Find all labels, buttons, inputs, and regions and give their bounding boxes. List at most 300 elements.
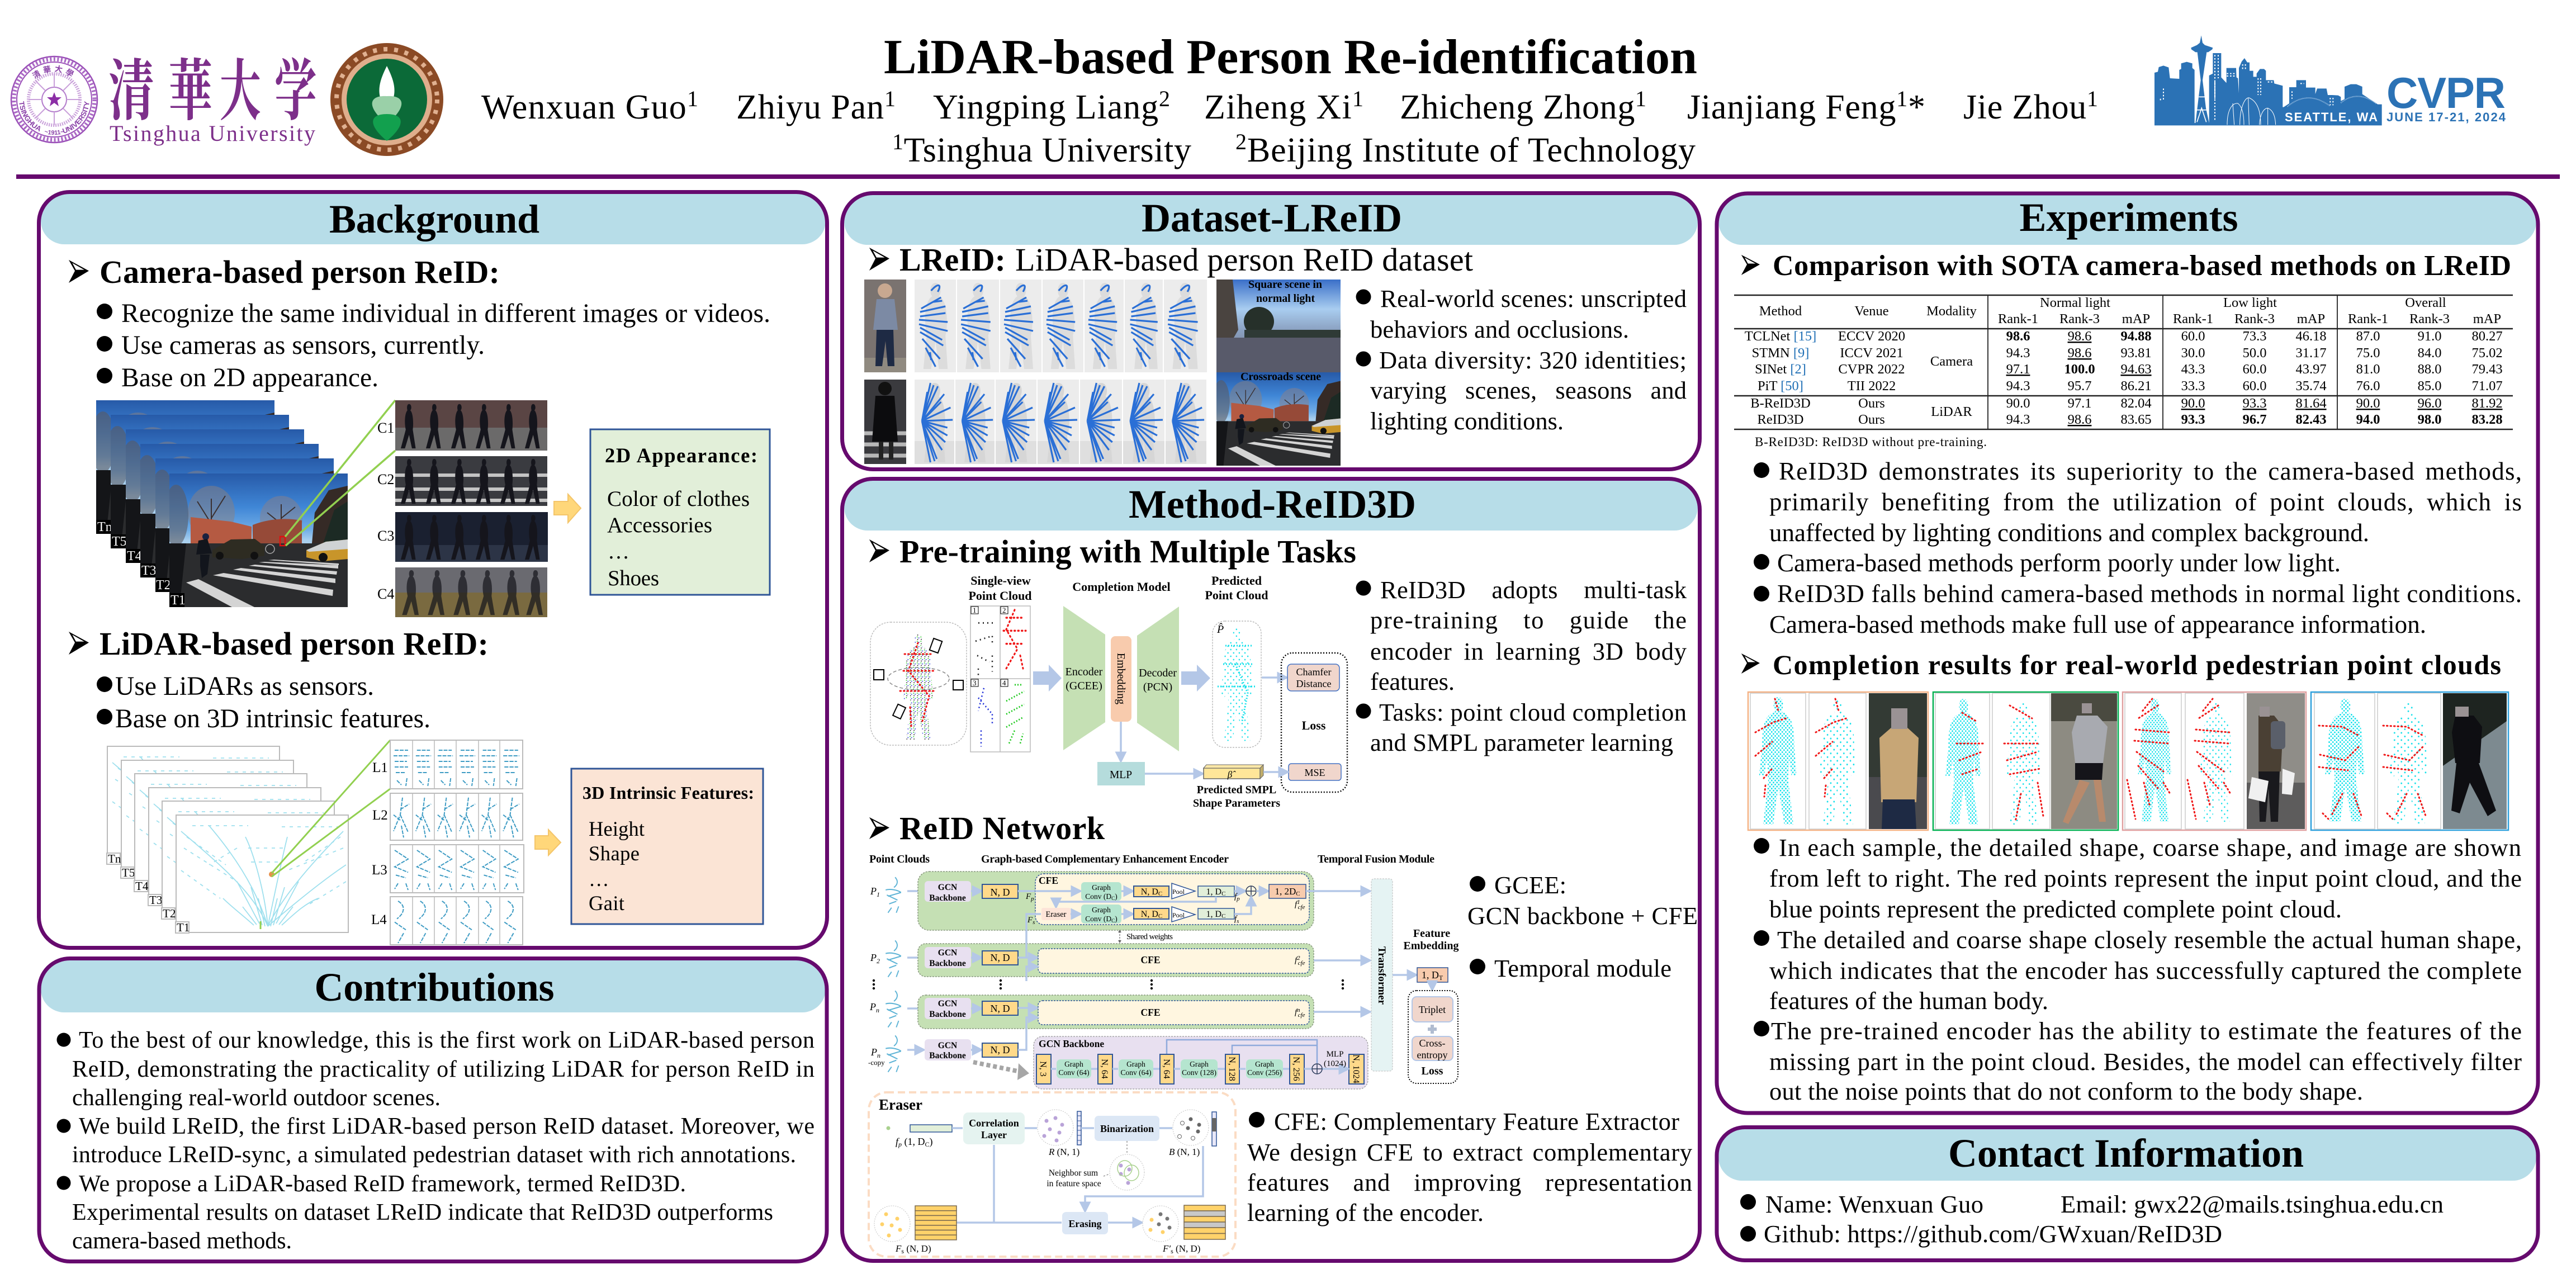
single-view grid <box>970 606 1030 752</box>
CFE block: ) <box>1115 892 1117 901</box>
image stack: LiDAR frames: Tn <box>108 852 121 865</box>
CFE block: C <box>1158 891 1162 897</box>
output features F's: (N, D) <box>1173 1243 1200 1254</box>
text: LiDAR bullets: Use LiDARs as sensors. <box>115 672 374 701</box>
predicted point cloud <box>1213 621 1261 747</box>
table: comparison: 60.0 <box>2243 378 2266 394</box>
text: contributions list: We build LReID, the first LiDAR-based person ReID dataset. Moreover, we <box>79 1114 815 1139</box>
GCN backbone detail: GCN Backbone <box>1039 1038 1104 1049</box>
table: comparison: 90.0 <box>2356 396 2380 411</box>
CFE block: F <box>1027 916 1033 925</box>
row 2: GCN <box>938 948 957 958</box>
CFE block: 1 <box>1297 899 1300 906</box>
column labels: Point Clouds <box>869 853 930 865</box>
row 2: 2 <box>1297 955 1300 962</box>
point clouds: P <box>871 1046 877 1058</box>
decoder: (PCN) <box>1143 681 1172 693</box>
erasing <box>1062 1212 1108 1234</box>
feature embedding <box>1393 927 1459 990</box>
image: square scene <box>1216 278 1341 372</box>
image stack: camera frames: T2 <box>156 578 171 593</box>
point clouds: -copy <box>868 1058 885 1067</box>
table: comparison: Rank-1 <box>2173 311 2213 326</box>
table: comparison: 94.63 <box>2120 362 2152 377</box>
panel: contributions <box>39 958 827 1261</box>
subheading: LReID: LReID: <box>899 242 1006 278</box>
CFE block: Conv (D <box>1085 915 1111 923</box>
text: camera bullets: Use cameras as sensors, currently. <box>121 331 485 360</box>
authors: Ziheng Xi <box>1204 88 1352 126</box>
table: comparison: 33.3 <box>2181 378 2205 394</box>
text: camera bullets: Base on 2D appearance. <box>121 363 378 392</box>
table: comparison: Low light <box>2223 295 2277 310</box>
CFE block: F <box>1026 892 1031 901</box>
image strips: camera crops C1-C4: C2 <box>377 471 394 487</box>
CFE block: f <box>1234 915 1237 924</box>
text: contributions list: challenging real-world outdoor scenes. <box>72 1085 441 1111</box>
feature embedding: Embedding <box>1404 940 1459 952</box>
text: contributions list: camera-based methods. <box>72 1228 292 1254</box>
input feature: C <box>925 1140 930 1148</box>
affiliations: Tsinghua University <box>904 131 1191 169</box>
text: CFE bullets: CFE: Complementary Feature Extractor <box>1274 1107 1679 1135</box>
text: dataset bullets: Data diversity: 320 identities; <box>1379 346 1687 374</box>
point clouds <box>868 877 901 1072</box>
text: CFE bullets <box>1247 1107 1693 1227</box>
table: comparison: 90.0 <box>2181 396 2205 411</box>
text: pre-training bullets: pre-training to guide the <box>1370 606 1687 634</box>
table: comparison: 80.27 <box>2471 329 2503 344</box>
callout: 3D intrinsic features: … <box>589 868 609 891</box>
table: comparison: 71.07 <box>2471 378 2503 394</box>
row 3: CFE <box>1140 1007 1161 1018</box>
CFE block: C <box>1296 891 1300 897</box>
table: comparison: 46.18 <box>2295 329 2327 344</box>
SMPL parameters <box>1193 765 1280 809</box>
image strips: LiDAR crops L1-L4: L4 <box>371 912 387 927</box>
binary mask B <box>1169 1110 1216 1157</box>
table: comparison: 94.3 <box>2006 378 2030 394</box>
point clouds: n <box>877 1052 880 1059</box>
table: comparison: 75.0 <box>2356 345 2380 361</box>
GCN backbone detail: N, 3 <box>1038 1061 1048 1077</box>
input feature <box>887 1125 952 1148</box>
table: comparison: Venue <box>1854 304 1889 319</box>
embedding <box>1111 636 1131 722</box>
labels: single-view: Point Cloud <box>968 589 1032 603</box>
arrow: row 1 out <box>1306 890 1370 892</box>
table: comparison: 35.74 <box>2295 378 2327 394</box>
row 2: N, D <box>991 952 1010 963</box>
table: comparison: 94.3 <box>2006 345 2030 361</box>
table: comparison: 30.0 <box>2181 345 2205 361</box>
Tsinghua characters <box>108 37 317 134</box>
table: comparison: LiDAR <box>1931 404 1972 419</box>
authors <box>481 86 2098 126</box>
text: completion bullets: blue points represent the predicted complete point cloud. <box>1769 895 2342 923</box>
image stack: camera frames: Tn <box>97 520 112 534</box>
CFE block: C <box>1158 913 1162 920</box>
Tsinghua characters: 学 <box>274 37 317 134</box>
transformer: Transformer <box>1376 946 1388 1005</box>
vertical ellipsis <box>873 979 1344 989</box>
panel: contact <box>1717 1127 2538 1260</box>
reid loss: entropy <box>1417 1049 1447 1060</box>
table: comparison: Rank-1 <box>2348 311 2388 326</box>
row 3: n <box>1297 1007 1300 1014</box>
authors: Yingping Liang <box>933 88 1158 126</box>
CFE block <box>1025 874 1309 926</box>
GCN backbone detail: N, 64 <box>1162 1059 1171 1079</box>
image strips: camera crops C1-C4: C4 <box>377 586 394 602</box>
GCN backbone detail: Graph <box>1255 1060 1274 1068</box>
row 2: CFE <box>1140 954 1161 965</box>
text: pre-training bullets: Tasks: point cloud completion <box>1379 698 1687 726</box>
row 3 <box>918 995 1314 1029</box>
image: square scene: normal light <box>1256 292 1315 305</box>
table: comparison: 75.02 <box>2471 345 2503 361</box>
logo: CVPR Seattle: JUNE 17-21, 2024 <box>2386 110 2506 124</box>
text: completion bullets: missing part in the point cloud. Besides, the model can effectively filter <box>1769 1048 2522 1076</box>
table: comparison: 43.97 <box>2295 362 2327 377</box>
authors: Jianjiang Feng <box>1687 88 1896 126</box>
text: comparison bullets: Camera-based methods make full use of appearance information. <box>1769 610 2426 638</box>
text: contributions list <box>57 1027 815 1254</box>
table: comparison: 81.92 <box>2471 396 2503 411</box>
CFE block: 1, D <box>1206 910 1221 919</box>
row 2 <box>918 944 1314 977</box>
text: contributions list: To the best of our knowledge, this is the first work on LiDAR-based person <box>79 1027 815 1053</box>
similarity R: R (N, 1) <box>1048 1147 1079 1157</box>
CFE block: ) <box>1115 915 1117 923</box>
input feature: p <box>898 1140 902 1148</box>
row 3: Backbone <box>929 1010 966 1019</box>
callout: 3D intrinsic features: Shape <box>589 842 640 865</box>
table: comparison: 31.17 <box>2295 345 2327 361</box>
arrow: dashed expansion <box>973 1062 1029 1080</box>
image strips: camera crops C1-C4 <box>377 400 548 617</box>
Tsinghua name: Tsinghua University <box>110 121 315 146</box>
encoder: Encoder <box>1066 666 1103 678</box>
labels: predicted: Predicted <box>1211 574 1262 588</box>
arrows: eraser flow <box>952 1128 1203 1223</box>
callout: 2D appearance: … <box>608 539 629 564</box>
image stack: LiDAR frames: T1 <box>177 921 190 934</box>
CFE block: C <box>1111 896 1115 901</box>
arrow: to chamfer <box>1262 676 1287 679</box>
authors: Wenxuan Guo <box>481 88 686 126</box>
CFE block: Graph <box>1092 883 1111 892</box>
row 4: copy: N, D <box>991 1044 1010 1055</box>
table: comparison: 98.6 <box>2006 329 2030 344</box>
row 1: GCEE branch <box>918 872 1314 930</box>
GCN backbone detail: N, 128 <box>1227 1057 1237 1081</box>
CFE block: f <box>1295 900 1297 909</box>
reid loss: Loss <box>1422 1065 1443 1077</box>
table: comparison: 60.0 <box>2243 362 2266 377</box>
GCN backbone detail: N, 256 <box>1291 1057 1301 1081</box>
icon: Tsinghua seal <box>10 56 98 143</box>
GCN backbone detail: Conv (128) <box>1182 1068 1216 1077</box>
callout: 2D appearance: 2D Appearance: <box>605 444 757 467</box>
loss group: Chamfer <box>1296 666 1331 678</box>
text: comparison bullets: ReID3D falls behind camera-based methods in normal light conditions. <box>1777 580 2522 608</box>
image: pedestrian photo row 2 <box>864 380 906 464</box>
arrow: MLP to SMPL <box>1145 773 1203 775</box>
text: contact details: Name: Wenxuan Guo <box>1765 1190 1983 1218</box>
arrow: into encoder <box>1033 665 1062 692</box>
table: comparison: 94.0 <box>2356 412 2380 427</box>
table: comparison: Rank-3 <box>2059 311 2100 326</box>
feature embedding: 1, D <box>1422 969 1439 981</box>
authors: 1 <box>884 86 896 111</box>
table: comparison: 93.3 <box>2181 412 2205 427</box>
row 4: copy: GCN <box>938 1041 957 1050</box>
table: comparison: Ours <box>1858 412 1885 427</box>
affiliations: 1 <box>892 129 903 154</box>
similarity R <box>1038 1110 1081 1157</box>
table: comparison: 100.0 <box>2064 362 2095 377</box>
neighbor sum <box>1046 1154 1144 1190</box>
SMPL parameters: Predicted SMPL <box>1197 784 1276 796</box>
image: crossroads scene: Crossroads scene <box>1240 371 1321 383</box>
text: pre-training bullets: ReID3D adopts multi-task <box>1380 576 1687 604</box>
table: comparison: 50.0 <box>2243 345 2266 361</box>
icon: Seattle skyline <box>2154 35 2382 125</box>
transformer <box>1371 879 1393 1071</box>
subheading: camera-based: Camera-based person ReID: <box>100 254 500 290</box>
table note: B-ReID3D: ReID3D without pre-training. <box>1755 435 1987 449</box>
arrow: row 3 out <box>1314 1011 1370 1013</box>
output features F's <box>1143 1205 1225 1255</box>
image strips: LiDAR crops L1-L4: L2 <box>372 808 388 823</box>
table: comparison: ECCV 2020 <box>1838 329 1905 344</box>
text: dataset bullets: lighting conditions. <box>1370 407 1564 435</box>
text: comparison bullets: ReID3D demonstrates its superiority to the camera-based methods, <box>1779 457 2522 485</box>
authors: 1 <box>1635 86 1646 111</box>
table: comparison: 84.0 <box>2418 345 2441 361</box>
binarization: Binarization <box>1100 1123 1154 1134</box>
correlation layer: Correlation <box>969 1117 1019 1129</box>
affiliations: 2 <box>1235 129 1247 154</box>
image stack: LiDAR frames: T5 <box>122 866 135 879</box>
text: CFE bullets: learning of the encoder. <box>1247 1199 1484 1227</box>
single-view grid: 1 <box>973 606 976 614</box>
CFE block: f <box>1234 892 1237 901</box>
CFE block: Graph <box>1092 906 1111 914</box>
text: completion bullets <box>1754 834 2522 1105</box>
text: completion bullets: from left to right. The red points represent the input point cloud, and the <box>1769 864 2522 892</box>
arrow: out of decoder <box>1181 665 1210 692</box>
image stack: camera frames <box>91 400 395 608</box>
table: comparison: Rank-3 <box>2234 311 2275 326</box>
binary mask B: B (N, 1) <box>1169 1147 1200 1157</box>
callout: 2D appearance: Accessories <box>607 513 712 537</box>
subheading: LiDAR-based: LiDAR-based person ReID: <box>100 626 489 662</box>
row 3: N, D <box>991 1003 1010 1014</box>
callout: 2D appearance: Color of clothes <box>607 487 750 511</box>
table: comparison <box>1734 295 2513 429</box>
subheading: ReID network: ReID Network <box>899 810 1105 846</box>
table: comparison: 93.81 <box>2120 345 2152 361</box>
image: crossroads scene <box>1213 371 1341 466</box>
text: GCEE bullets <box>1467 871 1698 982</box>
text: camera bullets: Recognize the same individual in different images or videos. <box>121 299 770 328</box>
sample 2 <box>1933 692 2118 830</box>
shared weights: Shared weights <box>1126 932 1173 941</box>
image stack: LiDAR frames <box>107 740 390 934</box>
Tsinghua characters: 大 <box>220 38 261 134</box>
loss group <box>1281 653 1347 792</box>
icon: Tsinghua seal: 清華大學 <box>32 65 74 79</box>
table: comparison: 87.0 <box>2356 329 2380 344</box>
heading: Background: Background <box>329 197 539 242</box>
table: comparison: B-ReID3D <box>1750 396 1811 411</box>
table: comparison: STMN [9] <box>1752 345 1809 361</box>
arrow: embedding to MLP <box>1120 722 1122 761</box>
loss group: Loss <box>1302 718 1326 732</box>
table: comparison: 85.0 <box>2418 378 2441 394</box>
table: comparison: Camera <box>1930 354 1973 369</box>
row 3: GCN <box>938 999 957 1008</box>
image strips: LiDAR crops L1-L4: L1 <box>372 760 388 775</box>
GCN backbone detail: N, 64 <box>1100 1059 1109 1079</box>
authors: 1 <box>2087 86 2098 111</box>
Tsinghua characters: 華 <box>168 37 212 133</box>
table: comparison: 98.6 <box>2068 345 2091 361</box>
table: comparison: 76.0 <box>2356 378 2380 394</box>
image stack: LiDAR frames: T2 <box>163 907 176 920</box>
text: pre-training bullets: encoder in learning 3D body <box>1370 637 1687 665</box>
reid loss <box>1408 991 1458 1083</box>
single-view grid: 2 <box>1002 606 1006 614</box>
GCN backbone detail: Graph <box>1126 1060 1145 1068</box>
loss group: Distance <box>1296 678 1331 689</box>
GCN backbone detail: N, 1024 <box>1351 1054 1361 1083</box>
panel: background <box>39 192 827 948</box>
text: completion bullets: The detailed and coarse shape closely resemble the actual human shape, <box>1777 926 2522 954</box>
GCN backbone detail: Graph <box>1190 1060 1209 1068</box>
title: LiDAR-based Person Re-identification <box>884 30 1697 84</box>
image stack: LiDAR frames: T4 <box>135 879 149 893</box>
feature embedding: Feature <box>1413 927 1450 940</box>
table: comparison: 97.1 <box>2006 362 2030 377</box>
text: GCEE bullets: GCEE: <box>1494 871 1566 899</box>
icon: Tsinghua seal: TSINGHUA <box>19 101 40 132</box>
point clouds: P <box>870 952 877 963</box>
point clouds: P <box>870 1001 876 1012</box>
authors: Zhiyu Pan <box>736 88 884 126</box>
text: pre-training bullets: features. <box>1370 667 1455 695</box>
CFE block: 1, D <box>1206 887 1221 897</box>
CFE block: Eraser <box>1045 910 1067 919</box>
input feature: f <box>896 1136 898 1147</box>
icon: Tsinghua seal: ~1911~ <box>45 130 64 135</box>
text: completion bullets: which indicates that the encoder has successfully captured the complete <box>1769 956 2522 984</box>
text: pre-training bullets: and SMPL parameter learning <box>1370 728 1673 756</box>
CFE block: Pool <box>1172 911 1185 919</box>
CFE block: CFE <box>1039 875 1058 886</box>
table: comparison: Rank-1 <box>1998 311 2038 326</box>
text: contributions list: ReID, demonstrating the practicality of utilizing LiDAR for person ReID in <box>72 1057 815 1082</box>
GCN backbone detail: (1024) <box>1324 1059 1346 1068</box>
row 1: GCEE branch: GCN <box>938 883 957 892</box>
decoder: Decoder <box>1139 667 1177 679</box>
text: dataset bullets: Real-world scenes: unscripted <box>1380 285 1687 312</box>
table: comparison: 79.43 <box>2471 362 2503 377</box>
point clouds: 2 <box>877 957 880 965</box>
table: comparison: 83.28 <box>2471 412 2503 427</box>
table: comparison: Overall <box>2405 295 2446 310</box>
predicted point cloud: P̂ <box>1216 623 1224 636</box>
text: camera bullets <box>97 299 770 392</box>
text: contributions list: We propose a LiDAR-based ReID framework, termed ReID3D. <box>79 1171 686 1197</box>
diagram: ReID network <box>868 853 1459 1089</box>
table: comparison: SINet [2] <box>1755 362 1806 377</box>
figure: completion samples <box>1748 692 2508 830</box>
table: comparison: ReID3D <box>1757 412 1804 427</box>
table: comparison: 73.3 <box>2243 329 2266 344</box>
text: comparison bullets: Camera-based methods perform poorly under low light. <box>1777 549 2341 577</box>
CFE block: Pool <box>1172 888 1185 896</box>
authors: 1 <box>1352 86 1363 111</box>
output features F's: F′ <box>1162 1243 1171 1254</box>
CFE block: Conv (D <box>1085 892 1111 901</box>
decoder <box>1137 607 1179 751</box>
table: comparison: Normal light <box>2040 295 2110 310</box>
text: CFE bullets: We design CFE to extract complementary <box>1247 1138 1693 1166</box>
row 1: GCEE branch: Backbone <box>929 893 966 903</box>
text: dataset bullets: varying scenes, seasons and <box>1370 376 1687 404</box>
binarization <box>1095 1116 1159 1141</box>
encoder <box>1063 606 1105 750</box>
Tsinghua characters: 清 <box>108 38 154 134</box>
CFE block: p <box>1030 896 1034 902</box>
table: comparison: 94.88 <box>2120 329 2152 344</box>
MLP <box>1097 762 1145 785</box>
neighbor sum: in feature space <box>1046 1179 1101 1188</box>
text: comparison bullets: primarily benefiting from the utilization of point clouds, which is <box>1769 488 2522 516</box>
authors: Jie Zhou <box>1963 88 2086 126</box>
image strips: LiDAR crops L1-L4 <box>371 740 524 945</box>
arrow: to 2D appearance <box>554 494 581 523</box>
logo: CVPR Seattle: SEATTLE, WA <box>2285 110 2378 124</box>
input feature: (1, D <box>902 1136 925 1148</box>
callout: 3D intrinsic features: Height <box>589 817 645 840</box>
input point cloud <box>870 622 967 745</box>
authors: 1 <box>1896 86 1907 111</box>
CFE block: s <box>1033 919 1035 926</box>
SMPL parameters: β̂ <box>1227 769 1236 780</box>
table: comparison: 88.0 <box>2418 362 2441 377</box>
subheading: pre-training: Pre-training with Multiple Tasks <box>899 533 1356 570</box>
panel: dataset <box>842 193 1699 470</box>
table: comparison: 94.3 <box>2006 412 2030 427</box>
labels: predicted <box>1205 574 1268 602</box>
callout: 3D intrinsic features: Gait <box>589 892 624 915</box>
point clouds: P <box>870 886 877 897</box>
table: comparison: 90.0 <box>2006 396 2030 411</box>
input features Fs: s <box>901 1247 904 1255</box>
arrows: inputs <box>907 891 924 1050</box>
logo: Beijing Institute of Technology <box>330 43 443 156</box>
arrow: row 2 out <box>1314 959 1370 962</box>
row 1: GCEE branch: N, D <box>991 887 1010 898</box>
embedding: Embedding <box>1115 653 1127 704</box>
CFE block: C <box>1221 891 1225 897</box>
table: comparison: 96.7 <box>2243 412 2266 427</box>
authors: * <box>1908 88 1925 126</box>
